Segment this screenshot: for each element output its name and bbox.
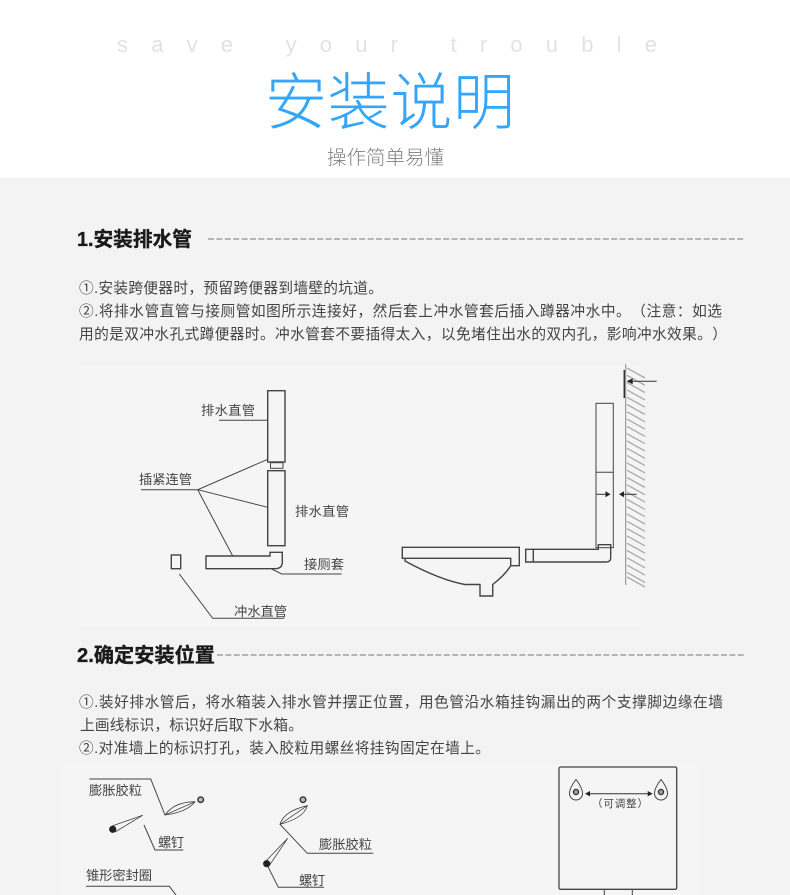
leader lines: [141, 420, 342, 618]
label: screw: 螺钉: [299, 873, 325, 888]
arrow: top: [627, 378, 657, 384]
label: toilet sleeve: 接厕套: [304, 556, 344, 572]
wall plate: [623, 370, 625, 398]
subtitle: save your trouble: save your trouble: [117, 32, 657, 57]
diagram: tank back: [559, 767, 677, 895]
text block: step 2 instructions: 上画线标识，标识好后取下水箱。: [80, 717, 303, 734]
diagram: pipe parts: [139, 391, 349, 619]
flush pipe: [171, 555, 181, 569]
arrow: adjustable: [585, 791, 653, 796]
heading: step 1: 1.安装排水管: [77, 228, 192, 251]
screw: [266, 838, 288, 866]
text block: step 1 instructions: ②.将排水管直管与接厕管如图所示连接好，然后套上冲水管套后插入蹲器冲水中。（注意：如选: [79, 302, 722, 320]
text block: step 2 instructions: [79, 694, 723, 757]
hook hole right: [654, 780, 668, 800]
plug: [280, 806, 307, 824]
hook hole left: [570, 780, 582, 800]
label: drain pipe lower: 排水直管: [295, 504, 349, 519]
screw: [112, 815, 143, 832]
label: flush pipe: 冲水直管: [234, 604, 287, 619]
diagram: expansion plug right: [263, 797, 373, 888]
sleeve: [526, 545, 611, 562]
lower drain pipe: [268, 471, 285, 546]
label: expansion plug: 膨胀胶粒: [319, 836, 372, 852]
text block: step 2 instructions: ②.对准墙上的标识打孔，装入胶粒用螺丝将挂钩固定在墙上。: [79, 740, 490, 757]
plug: [165, 802, 195, 815]
label: tight connector: 插紧连管: [139, 472, 192, 487]
arrow: wall side: [619, 491, 637, 497]
label: expansion plug: 膨胀胶粒: [89, 782, 142, 798]
label: screw: 螺钉: [158, 835, 184, 850]
wall hatching: [627, 368, 645, 587]
text block: step 1 instructions: 用的是双冲水孔式蹲便器时。冲水管套不要插得太入，以免堵住出水的双内孔，影响冲水效果。）: [79, 326, 727, 343]
title: 安装说明: [265, 69, 515, 138]
connector: [270, 463, 283, 468]
diagram: side view installed: [402, 364, 657, 596]
heading: step 2: 2.确定安装位置: [77, 643, 215, 667]
upper drain pipe: [268, 391, 285, 462]
label: conical seal: 锥形密封圈: [86, 867, 152, 883]
text block: step 1 instructions: ①.安装跨便器时，预留跨便器到墙壁的坑道。: [79, 280, 383, 297]
squat bowl: [402, 547, 519, 596]
toilet sleeve: [206, 552, 282, 569]
text block: step 1 instructions: [79, 280, 727, 343]
label: drain pipe upper: 排水直管: [201, 403, 255, 418]
label: adjustable: （可调整）: [592, 797, 648, 810]
pipe: [596, 403, 613, 548]
text block: step 2 instructions: ①.装好排水管后，将水箱装入排水管并摆正位置，用色管沿水箱挂钩漏出的两个支撑脚边缘在墙: [79, 694, 723, 711]
tagline: 操作简单易懂: [327, 147, 444, 169]
diagram: expansion plug left: [86, 779, 204, 895]
arrow: pipe side: [597, 491, 610, 497]
